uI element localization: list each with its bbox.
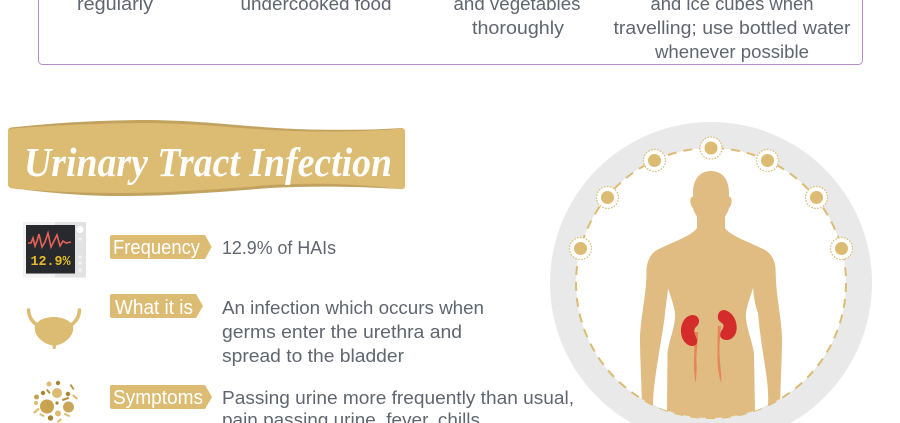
heading banner: Urinary Tract Infection: Urinary Tract Infection: [24, 139, 392, 185]
marker dots: [570, 137, 852, 260]
tip: bottled water: travelling; use bottled water: [614, 17, 850, 38]
right ureter: [718, 326, 721, 383]
tip: fruit and vegetables: [454, 0, 580, 38]
icon: bacteria cluster: [33, 381, 78, 423]
tip: bottled water: whenever possible: [654, 41, 809, 62]
tip: fruit and vegetables: thoroughly: [472, 17, 565, 38]
left kidney: [681, 315, 699, 346]
left ureter: [694, 332, 698, 383]
tag: Symptoms: Symptoms: [113, 387, 203, 409]
tag: Frequency: Frequency: [113, 237, 200, 259]
illustration: body in ring: [550, 122, 872, 423]
icon: heart monitor showing 12.9%: [23, 222, 86, 278]
text: what it is description: An infection which occurs when: [222, 297, 484, 318]
heading banner: Urinary Tract Infection: [8, 120, 405, 196]
human body: [640, 171, 782, 423]
text: what it is description: [222, 297, 484, 366]
icon: bladder: [28, 310, 80, 349]
right kidney: [718, 310, 737, 340]
tag: What it is: What it is: [115, 297, 193, 319]
panel: prevention tips: [38, 0, 862, 64]
text: what it is description: spread to the bladder: [222, 345, 404, 366]
tip: bottled water: [614, 0, 850, 62]
icon: heart monitor showing 12.9%: 12.9%: [30, 254, 71, 270]
dashed orbit: [576, 148, 846, 418]
text: symptoms description: Passing urine more frequently than usual,: [222, 387, 574, 408]
grey ring: [550, 122, 872, 423]
text: symptoms description: [222, 387, 574, 423]
text: frequency value: 12.9% of HAIs: [222, 237, 336, 258]
text: what it is description: germs enter the urethra and: [222, 321, 462, 342]
